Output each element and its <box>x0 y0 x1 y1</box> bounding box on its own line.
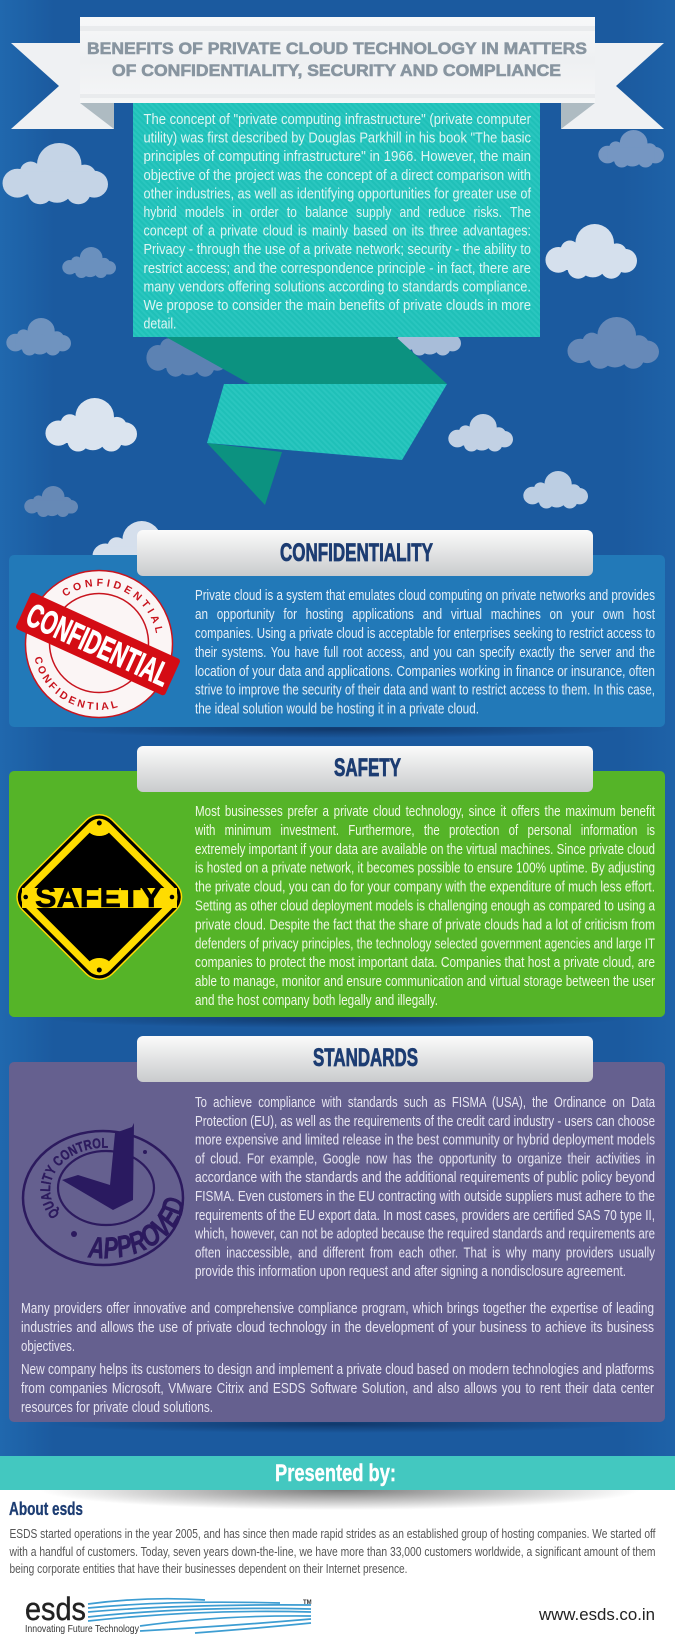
panel: intro text: We propose to consider the main benefits of private clouds in more <box>144 297 531 314</box>
about esds <box>9 1499 656 1576</box>
about esds: being corporate entities that have their businesses dependent on their Internet presence. <box>10 1562 408 1576</box>
text: compliance program paragraph <box>21 1300 654 1355</box>
panel: intro text: other industries, as well as identifying opportunities for greater use of <box>144 185 532 202</box>
panel: intro text: utility) was first described by Douglas Parkhill in his book "The basic <box>144 130 531 147</box>
icon: confidential stamp: CONFIDENTIAL <box>35 656 118 710</box>
icon: safety diamond sign <box>22 820 177 974</box>
title: OF CONFIDENTIALITY, SECURITY AND COMPLIANCE <box>112 61 561 80</box>
heading: confidentiality <box>137 530 593 576</box>
panel: intro text: objective of the project was the concept of a direct comparison with <box>144 167 531 184</box>
panel: confidentiality <box>9 530 665 736</box>
icon: confidential stamp <box>16 570 180 718</box>
presented by band: Presented by: <box>275 1460 396 1487</box>
text: safety body <box>194 803 656 1009</box>
panel: intro text: restrict access; and the correspondence principle - in fact, there are <box>144 260 531 277</box>
text: new company paragraph: resources for private cloud solutions. <box>21 1399 213 1416</box>
logo: esds: esds <box>25 1591 86 1627</box>
icon: quality control approved stamp: APPROVED <box>87 1198 184 1259</box>
icon: confidential stamp: CONFIDENTIAL <box>21 596 176 693</box>
panel: intro text: many vendors offering solutions according to standards compliance. <box>144 278 531 295</box>
text: compliance program paragraph: objectives. <box>21 1338 75 1355</box>
title ribbon <box>11 17 664 129</box>
text: confidentiality body: the ideal solution would be hosting it in a private cloud. <box>195 700 479 718</box>
title <box>87 39 587 80</box>
about esds: About esds <box>9 1499 83 1519</box>
icon: safety diamond sign: SAFETY <box>35 881 162 914</box>
panel: intro text: detail. <box>144 316 176 333</box>
panel: safety <box>9 746 665 1028</box>
panel: intro text <box>133 100 540 337</box>
panel: intro text: hybrid models in order to balance supply and reduce risks. The <box>144 204 531 221</box>
footer white background <box>0 1490 675 1650</box>
text: new company paragraph <box>21 1361 654 1416</box>
panel: intro text: The concept of "private computing infrastructure" (private computer <box>144 111 531 128</box>
icon: quality control approved stamp <box>22 1123 184 1266</box>
icon: confidential stamp: CONFIDENTIAL <box>62 578 162 634</box>
heading: standards <box>137 1036 593 1082</box>
ribbon tail: intro folded ribbon <box>166 337 447 505</box>
panel: intro text: principles of computing infrastructure" in 1966. However, the main <box>144 148 531 165</box>
text: confidentiality body <box>195 587 656 718</box>
icon: quality control approved stamp: QUALITY CONTROL <box>40 1138 108 1218</box>
clouds <box>3 130 664 575</box>
presented by band <box>0 1456 675 1490</box>
panel: intro text: Privacy - through the use of a private network; security - the ability to <box>144 241 531 258</box>
band shadow <box>40 1470 640 1510</box>
title: BENEFITS OF PRIVATE CLOUD TECHNOLOGY IN MATTERS <box>87 39 587 58</box>
text: standards body <box>194 1094 655 1280</box>
text: safety body: and the host company both legally and illegally. <box>195 992 438 1009</box>
panel: intro text: concept of a private cloud is mainly based on its three advantages: <box>144 223 531 240</box>
logo: esds: TM <box>303 1600 312 1606</box>
heading: standards: STANDARDS <box>313 1044 418 1072</box>
logo: esds <box>25 1591 312 1635</box>
heading: safety <box>137 746 593 792</box>
heading: confidentiality: CONFIDENTIALITY <box>280 539 433 567</box>
logo: esds: Innovating Future Technology <box>25 1623 140 1635</box>
website url: www.esds.co.in <box>538 1605 655 1624</box>
heading: safety: SAFETY <box>334 754 401 782</box>
panel: standards <box>9 1036 665 1432</box>
